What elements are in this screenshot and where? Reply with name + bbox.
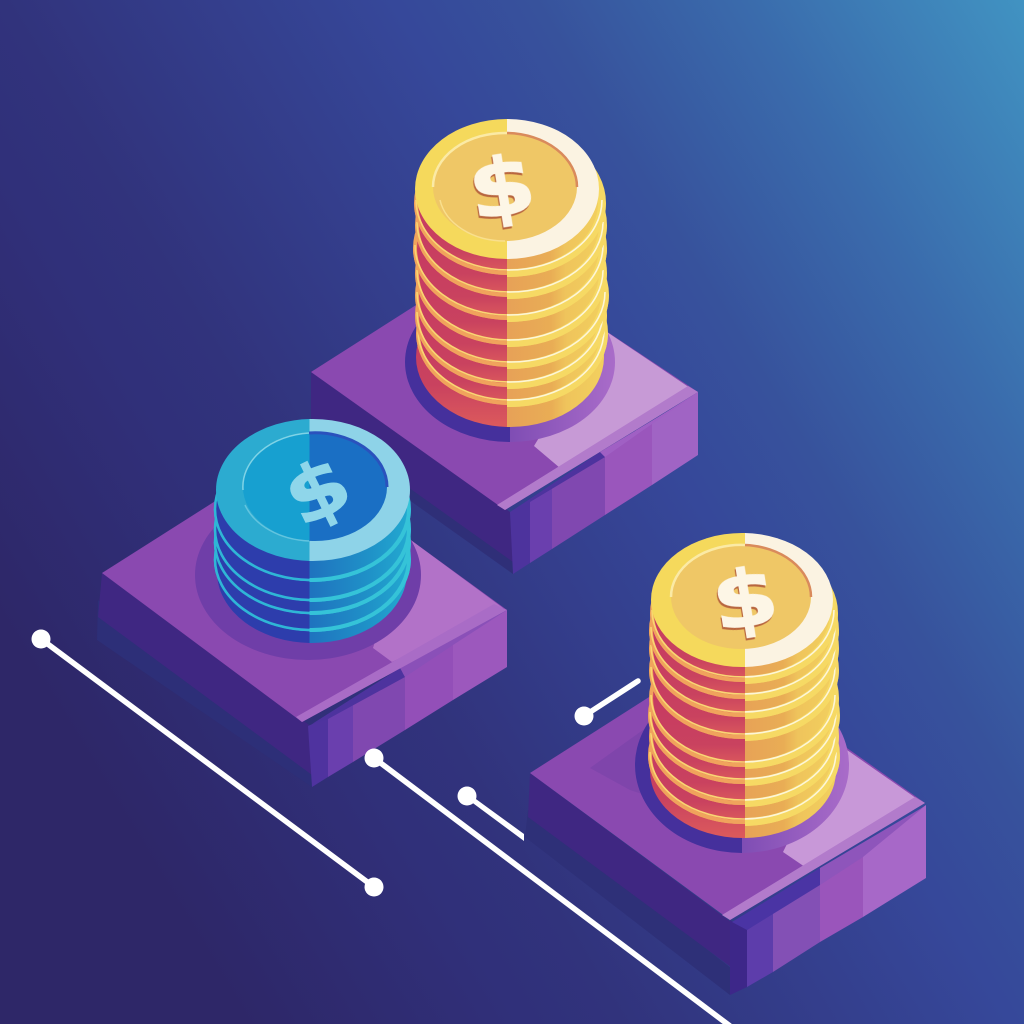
platform: front gold stack — [525, 655, 926, 995]
dollar sign: $ — [270, 438, 365, 545]
platform shadow — [97, 600, 320, 787]
top coin rim — [651, 533, 833, 667]
platform left face — [98, 573, 312, 775]
platform right face — [497, 386, 698, 574]
line: short upper — [574, 681, 638, 726]
platform right face — [296, 604, 507, 787]
coin stack: front gold — [650, 533, 836, 838]
platform top face — [530, 655, 925, 920]
platform ring — [405, 282, 615, 442]
line: centre long — [364, 748, 730, 1024]
coin edges left half — [413, 191, 507, 427]
platform highlight corner — [534, 330, 696, 468]
platform shadow — [311, 395, 520, 574]
platform highlight corner — [783, 743, 923, 867]
line: short lower — [458, 786, 524, 841]
platform top face — [102, 453, 507, 722]
top coin inner disc — [433, 133, 577, 241]
dollar sign: $ — [706, 550, 784, 650]
top coin rim — [216, 419, 410, 561]
line: left long — [32, 630, 384, 896]
platform highlight corner — [373, 538, 503, 662]
platform shadow — [525, 810, 740, 995]
coin edges right half — [507, 168, 609, 427]
platform left face — [528, 773, 735, 970]
platform left face — [311, 370, 513, 562]
platform: blue stack — [97, 453, 507, 787]
coin edges right half — [310, 497, 411, 643]
coin edges left half — [214, 493, 310, 643]
dollar sign: $ — [462, 137, 542, 239]
platform ring — [635, 677, 849, 853]
connector lines — [32, 630, 730, 1024]
top coin inner disc — [671, 545, 811, 649]
platform: back gold stack — [311, 256, 698, 574]
platform inner tint — [590, 725, 660, 800]
coin edges right half — [745, 586, 840, 838]
coin stack: blue — [215, 419, 410, 643]
coin edges left half — [648, 602, 745, 838]
top coin rim — [415, 119, 599, 259]
platform ring — [195, 490, 421, 660]
top coin inner disc — [243, 433, 387, 541]
coin stack: back gold — [415, 119, 605, 427]
platform top face — [311, 256, 698, 510]
platform right face — [722, 797, 926, 995]
